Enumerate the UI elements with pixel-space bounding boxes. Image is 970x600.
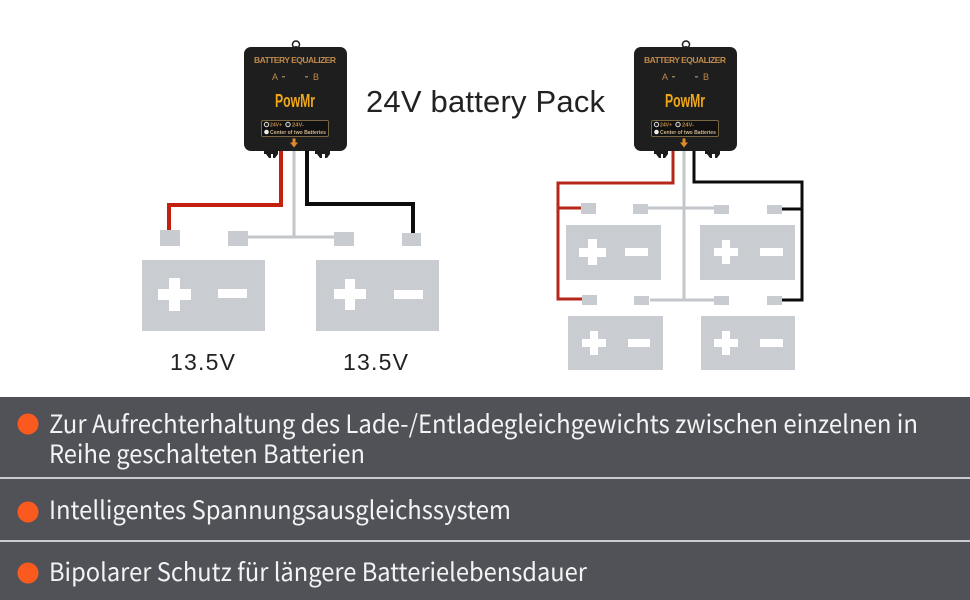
bullet icon 1 [18,414,38,434]
battery: top left [566,203,661,280]
text: feature 1: Reihe geschalteten Batterien [49,435,365,471]
title: 24V battery Pack: 24V battery Pack [366,84,606,119]
text: feature 3: Bipolarer Schutz für längere Batterielebensdauer [49,553,587,589]
wire: black negative [694,150,802,300]
battery: top right [700,205,795,280]
battery: right [316,232,439,331]
bullet icon 3 [18,562,38,584]
text: feature 2: Intelligentes Spannungsausgleichssystem [49,491,511,527]
text: feature 1: Zur Aufrechterhaltung des Lade-/Entladegleichgewichts zwischen einzelnen in [49,405,918,441]
wire: red positive [558,150,673,299]
icon: equalizer device left [244,41,347,158]
label: right voltage: 13.5V [343,349,409,375]
wire: black negative [307,150,413,233]
diagram: two batteries in series [142,41,439,375]
label: left voltage: 13.5V [170,349,236,375]
panel: feature list [0,397,970,600]
diagram: four batteries series-parallel [558,41,802,370]
wire: red positive [169,150,281,231]
wire: grey center wires [648,150,715,300]
battery: left [142,230,265,331]
wire: grey center wire [247,150,335,237]
battery: bottom right [701,296,795,370]
bullet icon 2 [18,502,38,522]
icon: equalizer device right [634,41,737,158]
battery: bottom left [568,295,663,370]
